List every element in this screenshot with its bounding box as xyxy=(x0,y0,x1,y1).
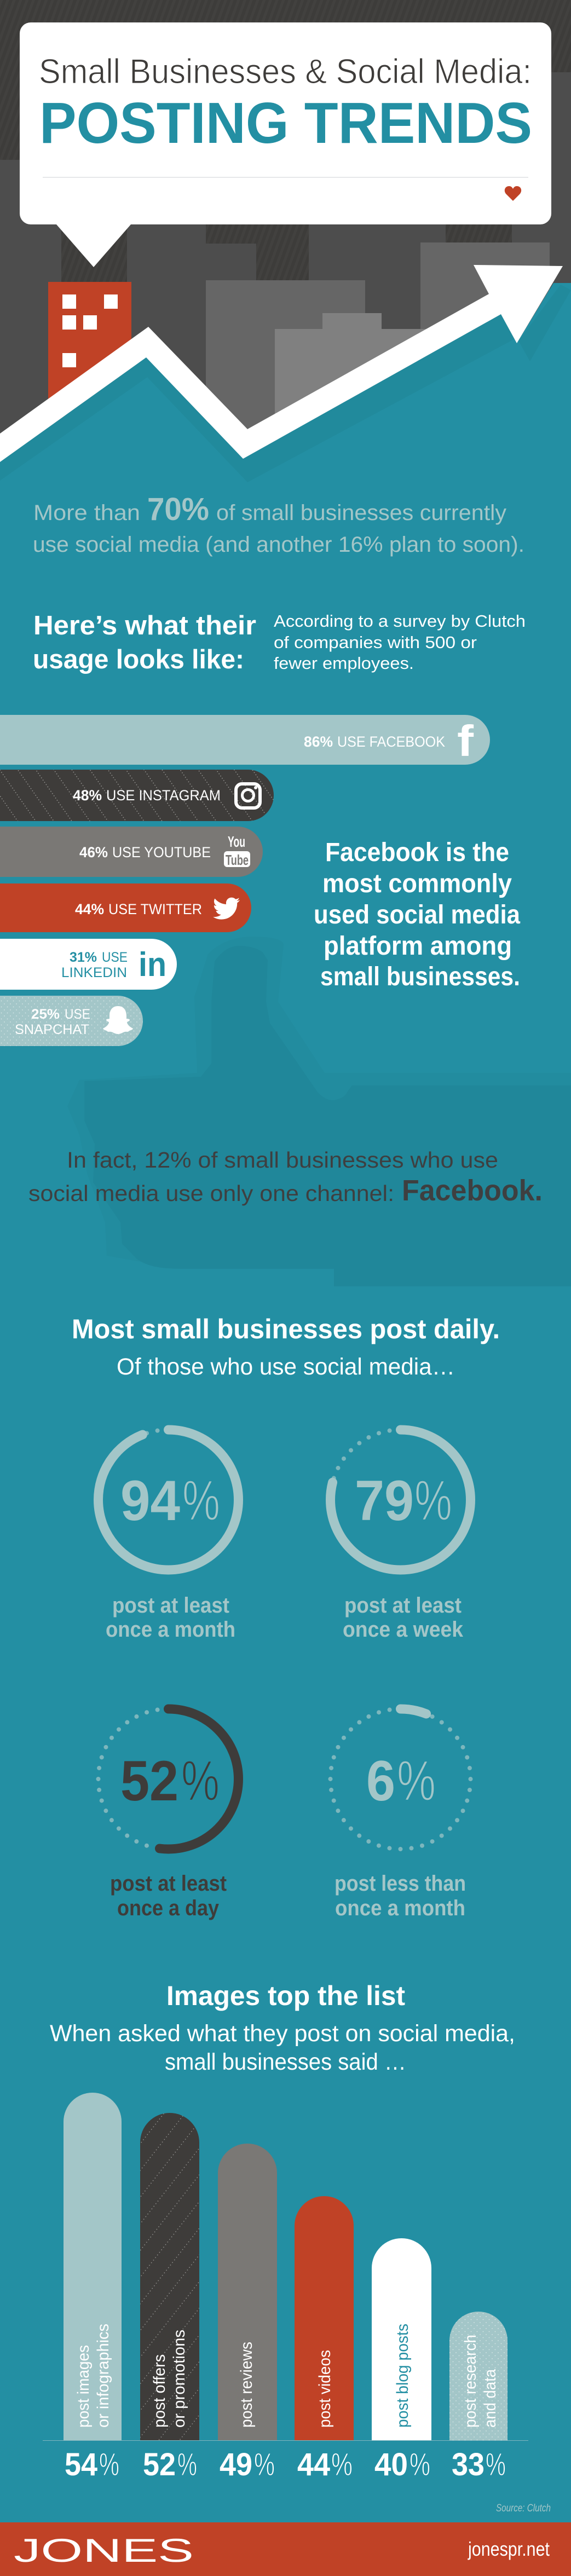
intro statement: 70% xyxy=(147,492,209,527)
column: videos 44%: % xyxy=(331,2447,353,2482)
donut: 52% daily: once a day xyxy=(117,1896,220,1920)
column: research and data 33%: % xyxy=(486,2447,506,2482)
icon: facebook: f xyxy=(457,717,474,765)
icon: instagram xyxy=(236,784,260,808)
single channel statement: social media use only one channel: xyxy=(28,1181,394,1206)
column: blog posts 40%: 40 xyxy=(374,2447,408,2482)
bar: Snapchat 25%: 25% xyxy=(31,1007,60,1022)
bar: Instagram 48%: 48% xyxy=(73,787,102,804)
icon: youtube: You xyxy=(228,833,245,850)
posting frequency heading: Most small businesses post daily. xyxy=(72,1314,500,1344)
footer band xyxy=(0,2522,571,2576)
source note: Source: Clutch xyxy=(496,2503,551,2514)
donut: 6% less than monthly: 6 xyxy=(366,1749,395,1813)
intro statement: use social media (and another 16% plan to soon). xyxy=(33,533,524,557)
bar: Snapchat 25%: USE xyxy=(65,1007,90,1022)
bar: Instagram 48%: USE INSTAGRAM xyxy=(106,787,221,804)
intro statement: More than xyxy=(33,501,140,525)
donut: 79% weekly xyxy=(331,1430,471,1642)
donut: 6% less than monthly: post less than xyxy=(334,1872,466,1896)
dark buildings xyxy=(0,72,571,493)
bar: YouTube 46%: USE YOUTUBE xyxy=(112,844,211,860)
icon: youtube xyxy=(224,833,250,868)
bar: Snapchat 25% xyxy=(0,996,143,1046)
donut: 6% less than monthly xyxy=(331,1709,471,1920)
donut: 94% monthly: 94 xyxy=(120,1469,180,1533)
bar: Facebook 86%: USE FACEBOOK xyxy=(337,733,445,750)
icon: youtube: Tube xyxy=(226,852,249,868)
bar: LinkedIn 31%: 31% xyxy=(70,950,97,965)
logo: Jones: JONES xyxy=(14,2532,194,2569)
single channel statement: In fact, 12% of small businesses who use xyxy=(67,1147,498,1173)
bar: Twitter 44%: USE TWITTER xyxy=(108,901,202,917)
column: offers or promotions 52%: 52 xyxy=(143,2447,176,2482)
posting frequency heading: Of those who use social media… xyxy=(117,1354,455,1380)
Facebook callout: most commonly xyxy=(322,869,512,898)
survey note xyxy=(274,611,526,673)
title line two: POSTING TRENDS xyxy=(39,91,532,155)
column: videos 44%: 44 xyxy=(297,2447,330,2482)
icon: heart xyxy=(505,186,521,201)
column: videos 44%: post videos xyxy=(316,2350,334,2428)
Facebook callout xyxy=(314,838,520,991)
column: research and data 33%: and data xyxy=(481,2369,499,2428)
intro statement xyxy=(33,492,524,557)
Facebook callout: platform among xyxy=(324,932,512,961)
column: videos 44% xyxy=(295,2196,354,2482)
content type heading: When asked what they post on social media, xyxy=(50,2020,515,2047)
column: reviews 49%: % xyxy=(254,2447,275,2482)
speech bubble title card xyxy=(20,22,551,267)
usage heading: usage looks like: xyxy=(33,645,244,674)
Facebook callout: small businesses. xyxy=(320,962,520,991)
column: images or infographics 54%: 54 xyxy=(65,2447,97,2482)
donut: 94% monthly: % xyxy=(182,1469,220,1533)
bar: Facebook 86% xyxy=(0,715,490,765)
donut: 52% daily: post at least xyxy=(110,1872,227,1896)
donut: 52% daily: % xyxy=(181,1749,220,1813)
column: blog posts 40% xyxy=(372,2238,431,2482)
bar: Twitter 44%: 44% xyxy=(75,901,104,917)
column: reviews 49%: post reviews xyxy=(238,2342,256,2428)
intro statement: of small businesses currently xyxy=(216,501,506,525)
website: jonespr.net xyxy=(468,2538,550,2560)
trend arrow xyxy=(0,265,563,462)
bubble shape xyxy=(20,22,551,267)
Facebook callout: Facebook is the xyxy=(325,838,509,867)
content type heading xyxy=(50,1980,515,2075)
donut: 94% monthly xyxy=(99,1430,239,1642)
bar: LinkedIn 31%: LINKEDIN xyxy=(61,965,127,980)
single channel statement xyxy=(28,1147,543,1207)
bar: LinkedIn 31%: USE xyxy=(102,950,128,965)
survey note: of companies with 500 or xyxy=(274,633,477,652)
icon: twitter xyxy=(213,898,240,920)
column: reviews 49% xyxy=(218,2144,277,2482)
content type heading: Images top the list xyxy=(166,1980,405,2011)
single channel statement: Facebook. xyxy=(402,1174,543,1207)
donut: 6% less than monthly: once a month xyxy=(335,1896,465,1920)
survey note: According to a survey by Clutch xyxy=(274,611,526,631)
usage heading: Here’s what their xyxy=(33,611,256,640)
column: research and data 33% xyxy=(449,2312,507,2482)
striped sky xyxy=(0,0,571,307)
donut: 79% weekly: post at least xyxy=(344,1593,462,1618)
donut: 52% daily xyxy=(99,1709,239,1920)
column: images or infographics 54%: % xyxy=(99,2447,119,2482)
column: research and data 33%: post research xyxy=(462,2335,480,2428)
donut: 79% weekly: once a week xyxy=(343,1618,464,1642)
column chart: what they post xyxy=(43,2093,528,2482)
red building xyxy=(48,282,131,493)
Facebook callout: used social media xyxy=(314,900,520,929)
survey note: fewer employees. xyxy=(274,654,414,673)
arrow shadow band xyxy=(0,285,571,482)
bar: Instagram 48% xyxy=(0,770,274,821)
bar: Twitter 44% xyxy=(0,883,251,932)
donut: 94% monthly: once a month xyxy=(106,1618,235,1642)
donut: 79% weekly: % xyxy=(414,1469,452,1533)
bar: LinkedIn 31% xyxy=(0,939,177,990)
icon: linkedin: in xyxy=(139,946,166,984)
donut: 79% weekly: 79 xyxy=(355,1469,414,1533)
icon: snapchat ghost xyxy=(103,1006,133,1034)
content type heading: small businesses said … xyxy=(165,2049,406,2075)
posting frequency heading xyxy=(72,1314,500,1380)
column: images or infographics 54%: post images xyxy=(74,2345,93,2428)
usage heading xyxy=(33,611,256,674)
column: offers or promotions 52%: or promotions xyxy=(170,2330,188,2428)
bar: YouTube 46% xyxy=(0,827,263,877)
bar: Facebook 86%: 86% xyxy=(304,733,333,750)
teal ground under the trend arrow xyxy=(0,283,571,493)
thumbs-up watermark xyxy=(67,937,571,1286)
column: images or infographics 54% xyxy=(64,2093,122,2482)
column: offers or promotions 52% xyxy=(140,2113,199,2482)
column: offers or promotions 52%: post offers xyxy=(151,2354,169,2428)
column: images or infographics 54%: or infographics xyxy=(94,2324,112,2428)
mid-grey buildings xyxy=(206,242,550,493)
donut: 52% daily: 52 xyxy=(120,1749,178,1813)
donut: 94% monthly: post at least xyxy=(112,1593,229,1618)
column: blog posts 40%: % xyxy=(409,2447,430,2482)
bar: Snapchat 25%: SNAPCHAT xyxy=(15,1022,89,1037)
donut: 6% less than monthly: % xyxy=(397,1749,436,1813)
column: blog posts 40%: post blog posts xyxy=(394,2324,412,2428)
column: offers or promotions 52%: % xyxy=(177,2447,197,2482)
column: reviews 49%: 49 xyxy=(220,2447,252,2482)
bar: YouTube 46%: 46% xyxy=(79,844,108,860)
header skyline illustration xyxy=(0,0,571,493)
column: research and data 33%: 33 xyxy=(452,2447,485,2482)
light-grey building xyxy=(275,313,438,493)
title line one: Small Businesses & Social Media: xyxy=(39,53,532,91)
